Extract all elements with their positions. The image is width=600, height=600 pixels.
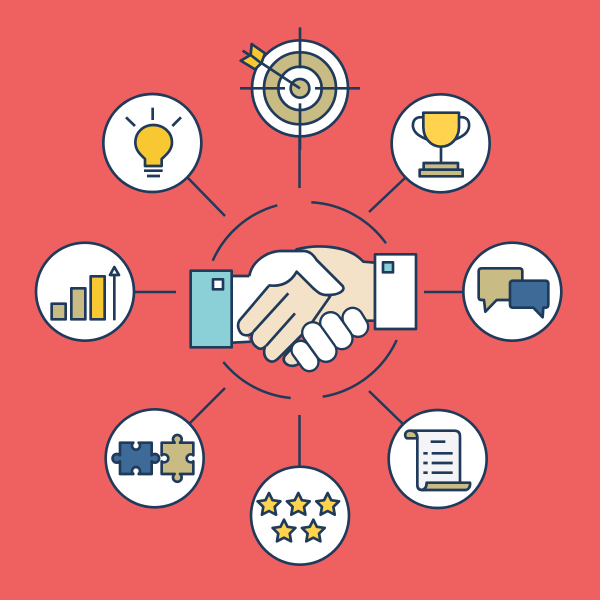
beige small fingertip xyxy=(284,349,301,366)
left cuff teal xyxy=(191,271,232,347)
right cuff white xyxy=(375,254,416,329)
arrow xyxy=(243,51,300,88)
contract scroll icon xyxy=(389,410,487,508)
puzzle pieces icon xyxy=(106,409,204,507)
crosshair xyxy=(240,27,360,150)
connector spokes xyxy=(135,125,464,466)
right cuff button xyxy=(383,262,393,272)
bar chart icon xyxy=(36,243,134,341)
broken ring around handshake xyxy=(213,202,397,398)
speech bubbles icon xyxy=(463,243,561,341)
target icon xyxy=(240,27,360,150)
left sleeve white xyxy=(232,276,270,343)
tan puzzle piece xyxy=(162,435,193,482)
white top hand xyxy=(249,251,343,295)
beige fingers xyxy=(238,272,330,362)
right hand beige palm xyxy=(270,246,375,337)
handshake xyxy=(191,246,416,366)
left cuff button xyxy=(213,279,223,289)
blue puzzle piece xyxy=(113,443,159,474)
beige finger divider lines xyxy=(253,293,295,346)
trophy icon xyxy=(392,94,490,192)
white fingers xyxy=(301,318,358,362)
lightbulb icon xyxy=(103,94,201,192)
rating stars icon xyxy=(251,467,349,565)
